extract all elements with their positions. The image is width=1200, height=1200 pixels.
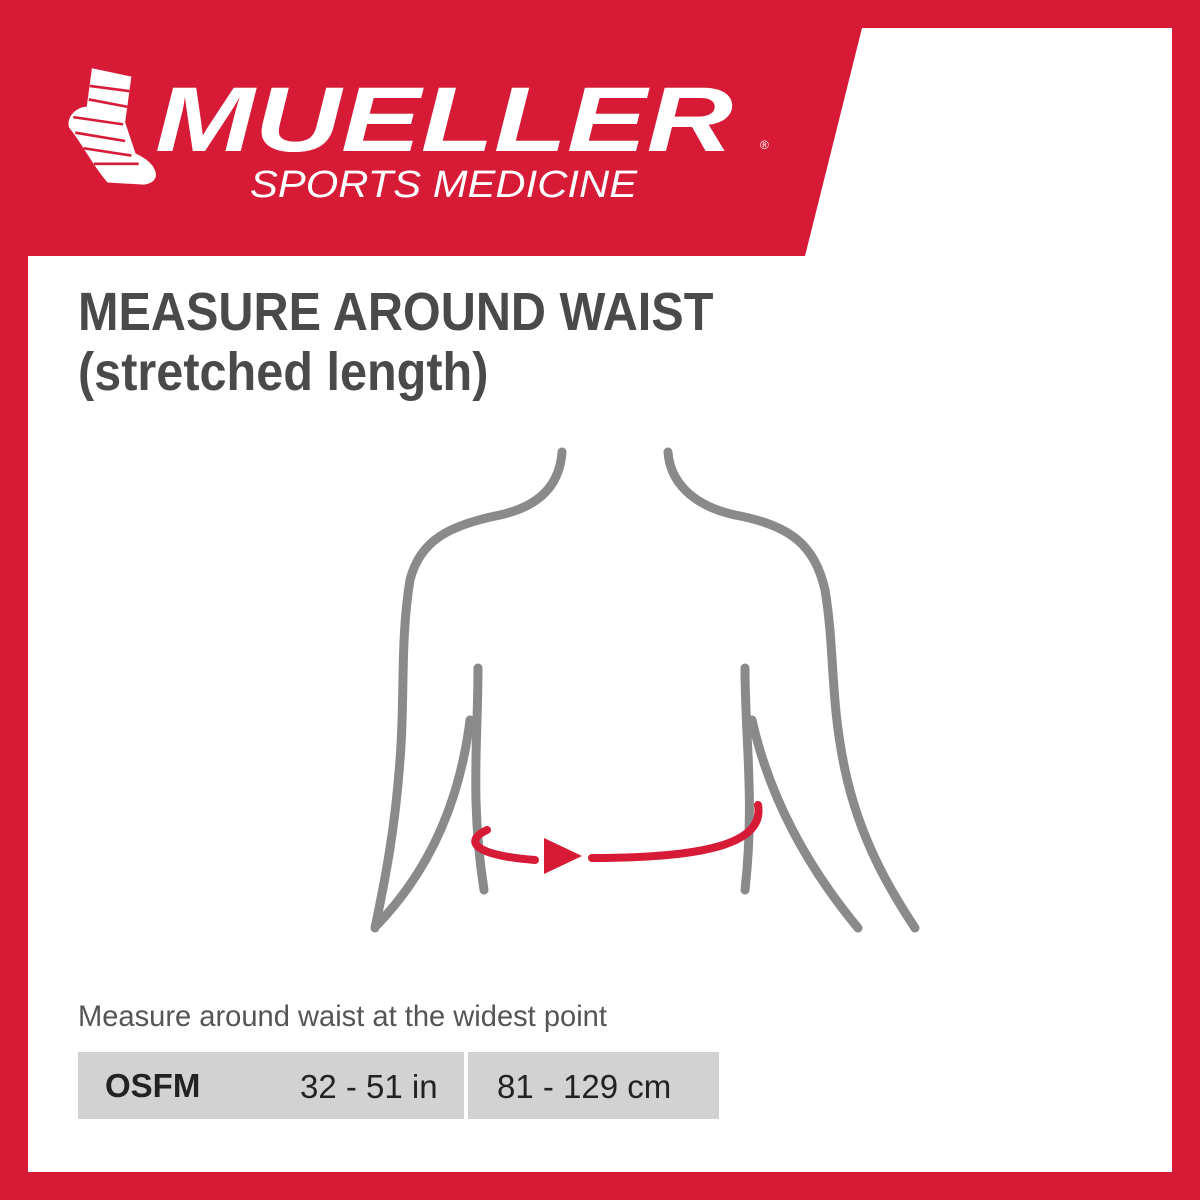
brand name: MUELLER	[155, 69, 733, 171]
icon: taped foot	[68, 68, 156, 185]
logo: ®	[760, 138, 769, 152]
logo	[68, 68, 769, 206]
title	[78, 282, 713, 402]
waist arrow	[475, 805, 759, 860]
size table: 81 - 129 cm	[497, 1068, 671, 1105]
title: MEASURE AROUND WAIST	[78, 282, 713, 342]
size table: 32 - 51 in	[300, 1068, 438, 1105]
size table	[78, 1052, 719, 1119]
subtitle: SPORTS MEDICINE	[250, 164, 637, 206]
instruction text: Measure around waist at the widest point	[78, 1000, 607, 1033]
red header band	[28, 28, 862, 256]
size table: OSFM	[105, 1067, 200, 1104]
title: (stretched length)	[78, 342, 488, 402]
